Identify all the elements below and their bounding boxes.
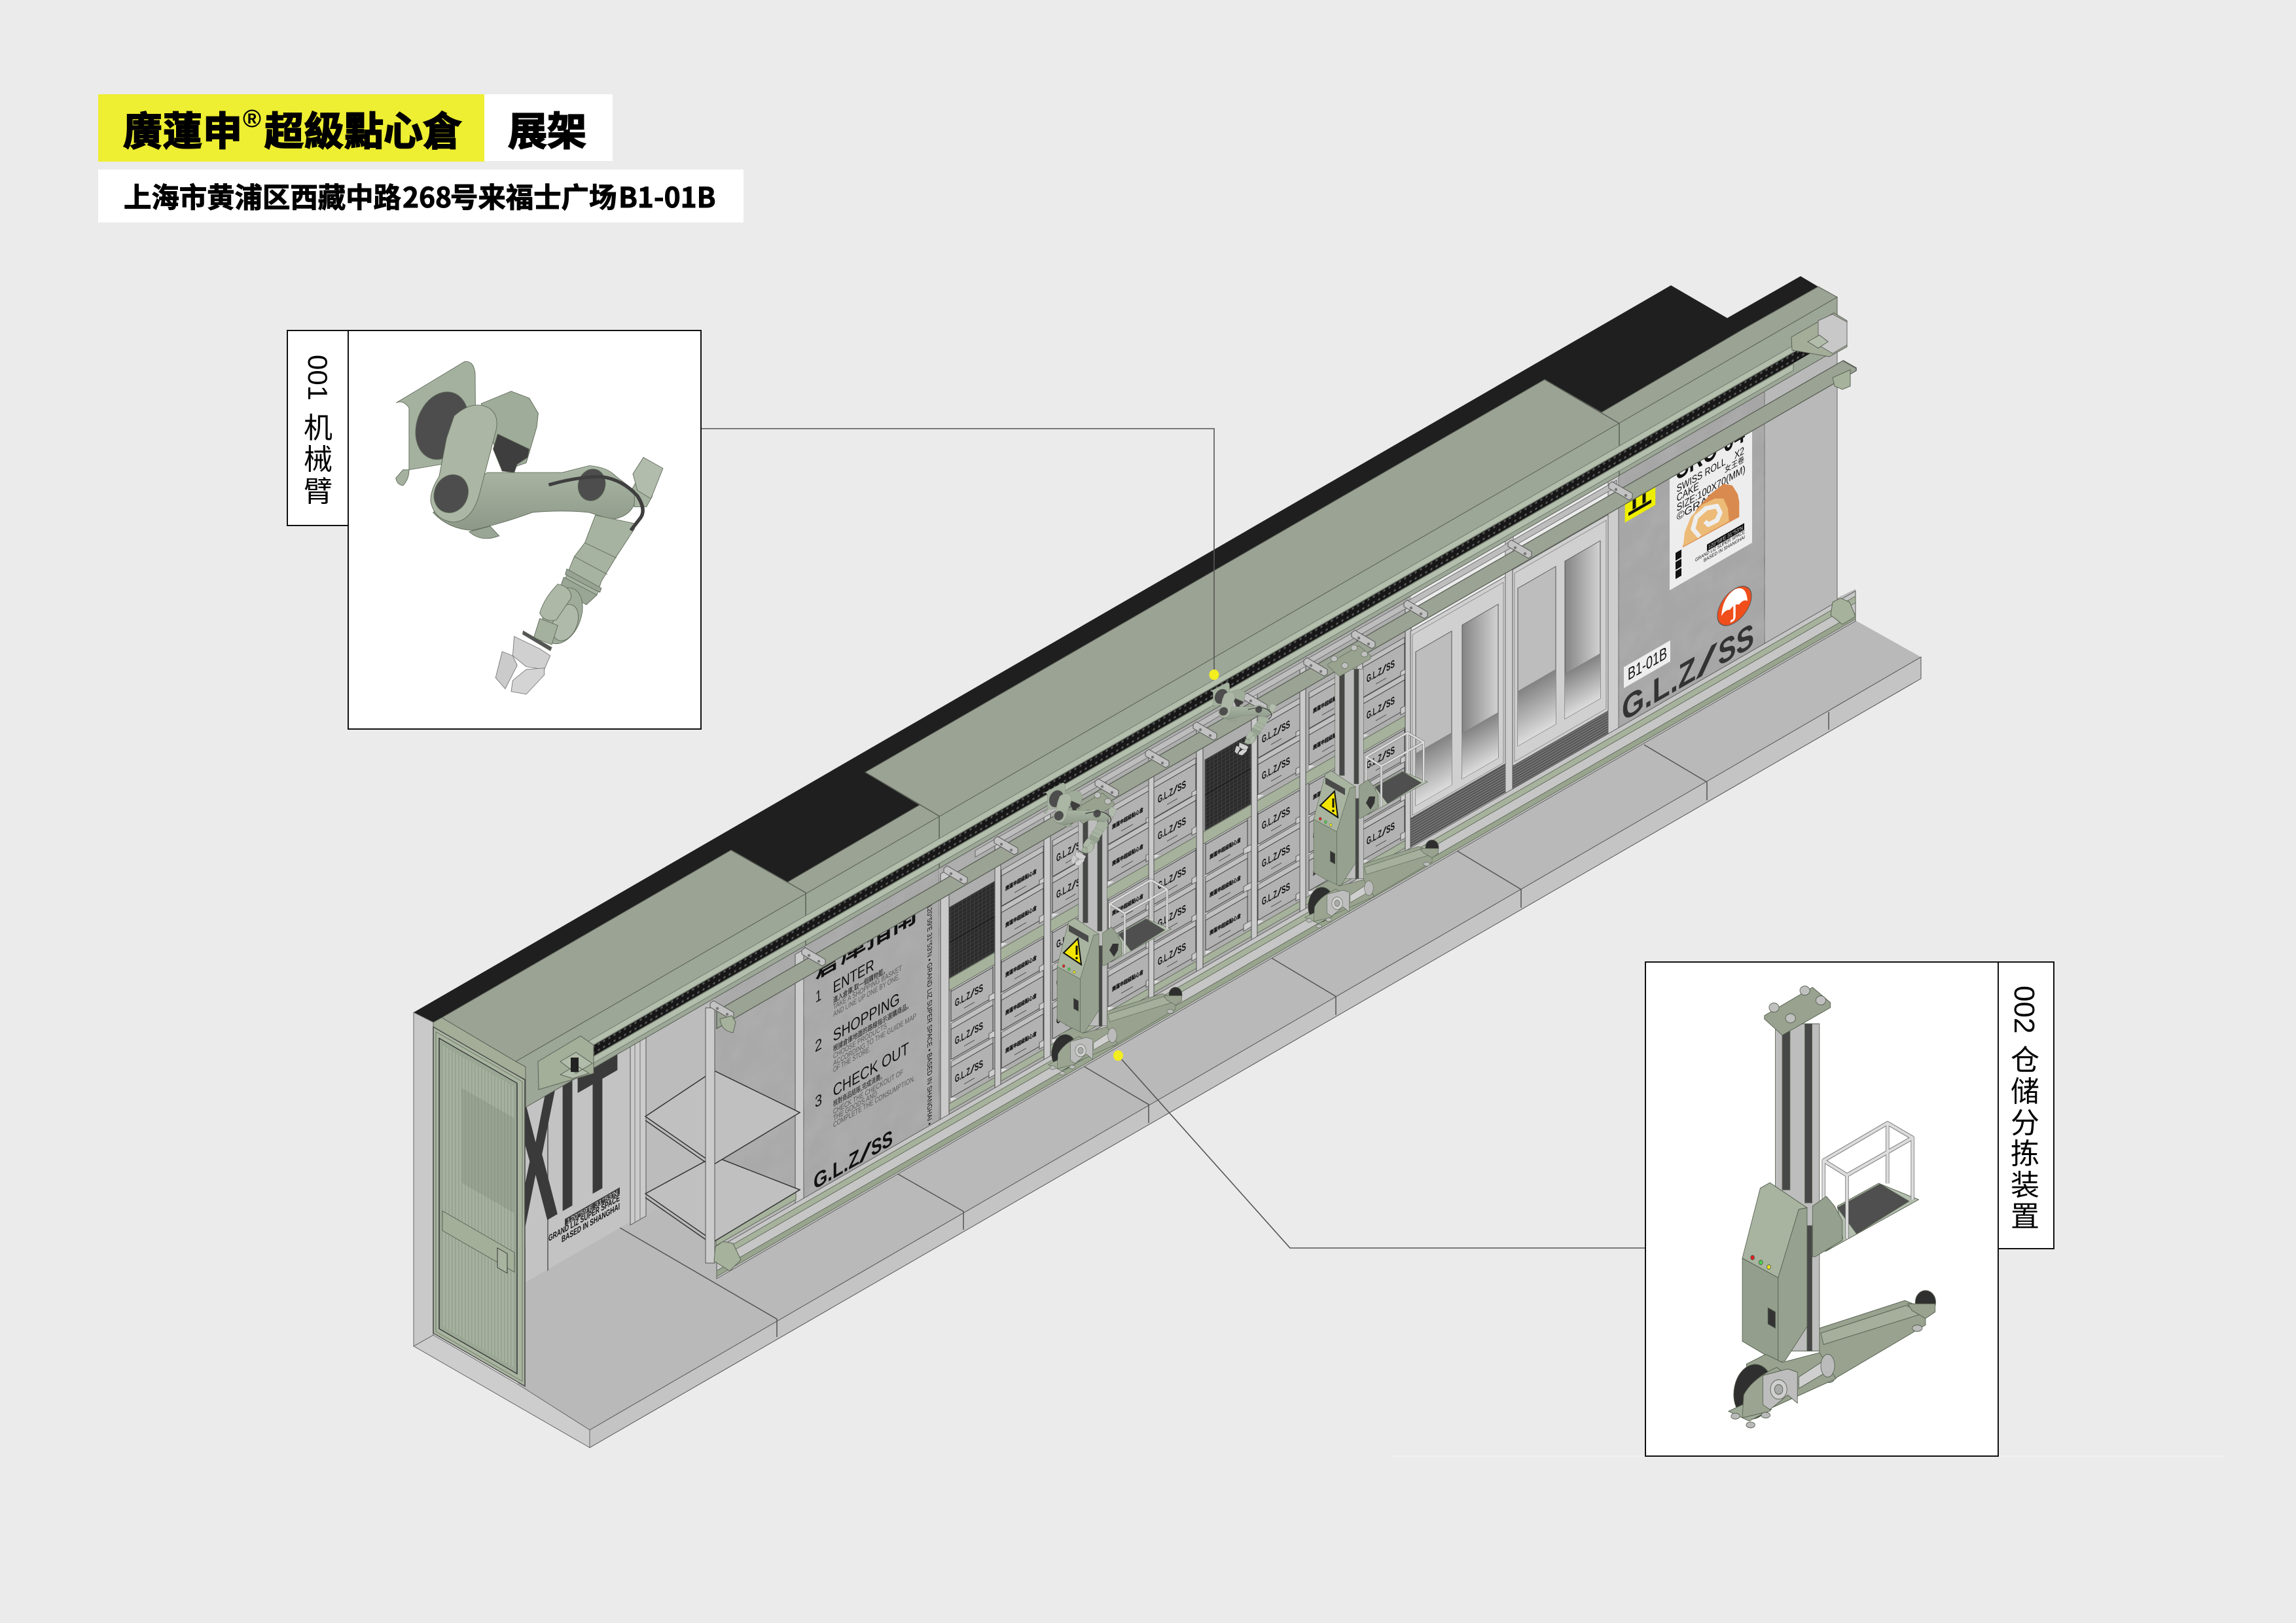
title: yellow tag	[98, 94, 484, 162]
bulkhead top surface	[442, 287, 1837, 1061]
fridge 2	[1505, 473, 1619, 800]
guide poster: G.L.Z	[814, 1144, 859, 1195]
left side strip	[414, 1012, 433, 1346]
sorting lifter A	[1049, 793, 1182, 1075]
label tab 002: 置	[2011, 1193, 2039, 1235]
dark panel 2	[1205, 734, 1251, 830]
label tab 002: 装	[2011, 1162, 2039, 1204]
track end caps	[714, 598, 1856, 1271]
guide poster: 2	[815, 1035, 822, 1056]
big brand G.L.Z/SS: SS	[1718, 615, 1754, 673]
big brand G.L.Z/SS: G.L.Z	[1622, 649, 1696, 729]
product poster: CAKE	[1677, 479, 1699, 505]
swiss roll illustration	[1683, 484, 1739, 548]
label tab 001	[287, 330, 348, 526]
guide poster: ENTER	[833, 955, 874, 997]
umbrella badge	[1717, 579, 1751, 633]
guide poster: ACCORDING TO THE GUIDE MAP	[833, 1011, 916, 1068]
product poster	[1670, 411, 1752, 590]
big brand G.L.Z/SS	[1622, 615, 1754, 730]
bar end bracket	[1833, 370, 1850, 389]
title: yellow tag: ®	[243, 105, 261, 133]
label tab 001: 臂	[304, 468, 332, 510]
main isometric display rack	[414, 276, 1921, 1448]
label tab 001: 机	[304, 404, 332, 446]
panel 002: sorting device	[1645, 962, 2054, 1456]
label tab 002: 002	[2008, 986, 2040, 1033]
guide poster: 核對商品結賬,完成消費。	[833, 1069, 885, 1109]
unit label B1-01B	[1624, 640, 1670, 688]
title: yellow tag: 蓮	[163, 100, 202, 157]
end light wall	[1765, 346, 1837, 646]
lifter detail	[1729, 986, 1936, 1428]
display bar	[717, 353, 1856, 1029]
guide poster: CHECK OUT	[833, 1039, 909, 1101]
guide poster: SHOPPING	[833, 989, 900, 1046]
shelf bay backs	[630, 943, 804, 1304]
title: white tag	[484, 94, 613, 161]
guide poster: 1	[816, 986, 821, 1007]
robot arm detail	[396, 361, 663, 694]
address: 上海市黄浦区西藏中路	[124, 176, 401, 216]
title: yellow tag: 廣	[123, 100, 162, 157]
product poster: 120°59'E 31°53'N	[1708, 524, 1743, 550]
exit wall: GRAND LIZ SUPER SPACE	[548, 1193, 620, 1244]
panel 001: robot arm	[287, 330, 701, 729]
fridge 1	[1410, 577, 1505, 847]
address: B1-01B	[619, 176, 715, 216]
curved bar bracket	[720, 1016, 736, 1033]
title: yellow tag: 點	[344, 100, 384, 157]
product poster: SWISS ROLL	[1677, 455, 1726, 495]
product poster: GRAND LIZ SUPER SPACE	[1695, 529, 1745, 563]
title: white tag: 展	[508, 100, 547, 157]
bulkhead front face	[516, 297, 1837, 1107]
product poster: SIZE:100X70(MM)	[1677, 462, 1746, 514]
guide poster: CHECK THE CHECKOUT OF	[833, 1067, 903, 1116]
guide poster: COMPLETE THE CONSUMPTION.	[833, 1074, 915, 1130]
robot arm A	[1044, 783, 1117, 866]
right drive plate and motor	[1791, 313, 1847, 357]
product poster: BASED IN SHANGHAI	[1704, 534, 1745, 563]
end concrete panel	[1619, 388, 1765, 733]
product poster: ©GRAND	[1677, 485, 1723, 524]
floor track	[717, 591, 1856, 1279]
unit label B1-01B: B1-01B	[1628, 643, 1667, 685]
title block	[98, 94, 744, 223]
storage shelving with boxes	[716, 592, 1411, 1258]
title: white tag: 架	[547, 100, 586, 157]
guide poster: THE GOODS AND	[833, 1089, 877, 1123]
title: yellow tag: 超	[264, 100, 304, 157]
exit wall: 120°59'E 31°53'N	[567, 1189, 618, 1226]
label tab 002: 储	[2011, 1068, 2039, 1110]
image box	[1645, 962, 1998, 1456]
guide poster: SS	[871, 1125, 893, 1162]
product poster: X2	[1734, 444, 1744, 462]
title: yellow tag: 級	[304, 100, 344, 157]
exit door	[433, 1027, 525, 1386]
upper light rail	[975, 480, 1617, 857]
product poster: SRC-04	[1676, 416, 1745, 487]
green side of bulkhead	[433, 1018, 526, 1080]
guide poster: 120°59'E 31°53'N ▪ GRAND LIZ SUPER SPACE ▪ BASED IN SHANGHAI ▪	[925, 902, 933, 1128]
guide poster: AND LINE UP ONE BY ONE.	[833, 972, 900, 1019]
robot arm B	[1210, 683, 1277, 755]
guide poster: OF THE STORE.	[833, 1044, 870, 1075]
guide poster	[804, 865, 939, 1205]
image box	[348, 330, 701, 729]
product poster: 女王卷	[1725, 452, 1744, 475]
sorting lifter B	[1305, 645, 1439, 928]
label tab 001: 械	[304, 436, 332, 478]
address	[98, 169, 744, 223]
guide poster: /	[859, 1137, 872, 1169]
leader line to robot arm	[701, 429, 1219, 680]
label tab 002: 仓	[2011, 1037, 2039, 1079]
leader line to lifter	[1113, 1050, 1645, 1248]
front shelf post	[706, 1008, 715, 1263]
guide poster: 根據倉庫地面的路線指示選購商品。	[833, 999, 912, 1054]
bar brackets	[710, 482, 1632, 1019]
title: yellow tag: 倉	[423, 100, 462, 157]
label tab 002: 拣	[2011, 1130, 2039, 1172]
big brand G.L.Z/SS: /	[1696, 636, 1717, 687]
floor platform	[414, 589, 1921, 1448]
exit wall: BASED IN SHANGHAI	[562, 1202, 620, 1245]
guide poster: CHOOSE PRODUCTS	[833, 1021, 887, 1061]
address: 号来福士广场	[450, 176, 617, 216]
label tab 002	[1998, 962, 2054, 1249]
label tab 002: 分	[2011, 1099, 2039, 1141]
title: yellow tag: 申	[203, 100, 242, 157]
yellow sticker	[1625, 478, 1655, 522]
guide poster: 3	[815, 1090, 822, 1112]
guide poster: 倉庫指南	[815, 890, 918, 987]
rooftop black strip	[414, 276, 1818, 1022]
address: 268	[403, 176, 452, 216]
exit wall: EXIT	[468, 1007, 618, 1306]
wall-plane elements	[468, 293, 1856, 1422]
title: yellow tag: 心	[384, 100, 423, 157]
guide poster: TAKE A SHOPPING BASKET	[833, 963, 902, 1012]
dark panel 1	[949, 881, 995, 978]
label tab 001: 001	[302, 355, 333, 401]
left sprocket plate	[538, 1036, 594, 1090]
rails and chain	[563, 325, 1828, 1080]
left shelves	[645, 1071, 800, 1245]
guide poster: 進入倉庫,取一個購物籃。	[833, 963, 888, 1005]
